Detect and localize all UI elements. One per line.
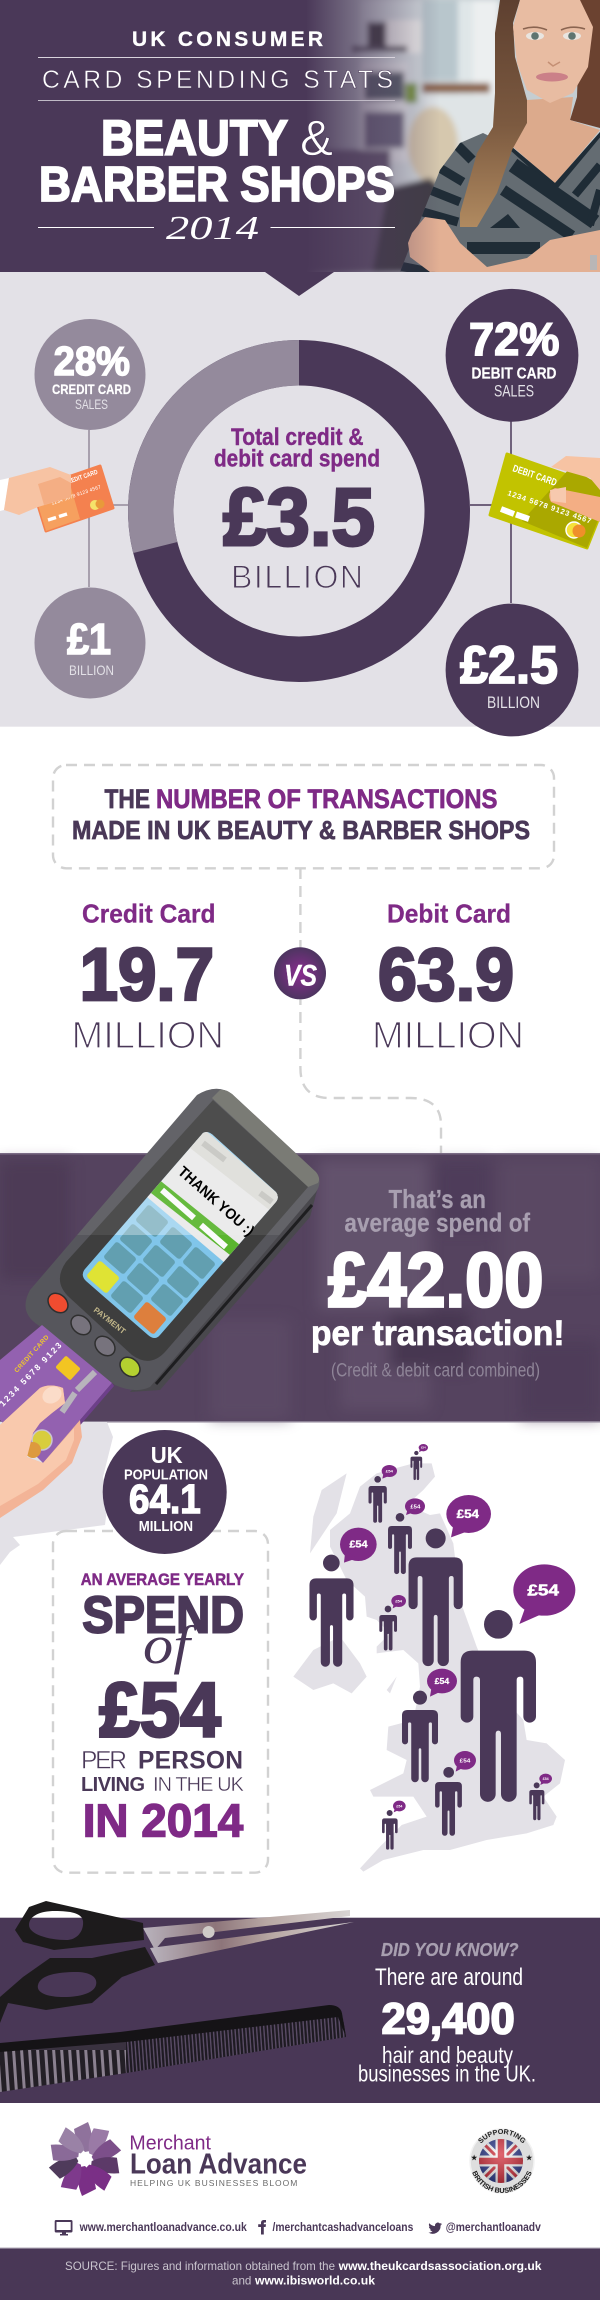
- yearly spend text: SPEND: [82, 1587, 244, 1645]
- average spend text: £42.00: [328, 1238, 544, 1324]
- connector lines: [89, 421, 511, 603]
- credit card count: MILLION: [72, 1015, 224, 1057]
- icon: hand holding credit card: 1234 5678 9123 4567: [51, 484, 102, 507]
- title: BEAUTY: [101, 110, 288, 166]
- thank you text: THANK YOU :): [174, 1163, 258, 1240]
- bubble: £2.5 billion: BILLION: [487, 694, 540, 712]
- card stripe: [62, 1372, 95, 1412]
- icon: hand holding debit card: 1234 5678 9123 4567: [506, 488, 592, 526]
- yearly spend text: [81, 1570, 245, 1847]
- figure: mid england: £54: [435, 1677, 450, 1686]
- panel: average spend: [0, 1153, 600, 1422]
- figure: far north: [369, 1465, 397, 1523]
- ring: [590, 255, 597, 270]
- vs badge: VS: [284, 960, 317, 993]
- card chip: [55, 1355, 81, 1381]
- website text: www.merchantloanadvance.co.uk: [79, 2220, 247, 2234]
- bubble: £1 billion: [34, 588, 146, 698]
- icon: twitter: [428, 2223, 442, 2234]
- figure: wales small: [382, 1801, 406, 1850]
- logo wordmark: HELPING UK BUSINESSES BLOOM: [130, 2178, 297, 2188]
- average spend text: (Credit & debit card combined): [331, 1361, 540, 1382]
- yearly spend text: PERSON: [138, 1747, 243, 1774]
- bubble: 72% debit card: DEBIT CARD: [472, 366, 556, 383]
- source text: SOURCE: Figures and information obtained from the: [65, 2259, 335, 2273]
- centre total text: [214, 424, 380, 595]
- heading: NUMBER OF TRANSACTIONS: [156, 784, 498, 814]
- figure: central small: [379, 1595, 406, 1651]
- badge flag: [479, 2139, 523, 2183]
- bubble: £1 billion: BILLION: [69, 662, 114, 678]
- figure: large upper: [409, 1495, 491, 1666]
- terminal rear edge: [130, 1187, 318, 1392]
- figure: central small: £54: [395, 1600, 403, 1604]
- debit card count: [372, 899, 524, 1057]
- figure: left: [309, 1528, 377, 1667]
- centre total text: debit card spend: [214, 446, 380, 473]
- title: &: [300, 110, 333, 166]
- map shadow behind hand: [0, 1422, 113, 1565]
- figure: upper middle: £54: [410, 1504, 420, 1510]
- population bubble: UK: [151, 1442, 183, 1468]
- panel: source footer: [0, 2247, 600, 2300]
- average spend text: average spend of: [344, 1208, 530, 1238]
- did you know text: DID YOU KNOW?: [381, 1939, 518, 1960]
- figure: largest: £54: [527, 1583, 559, 1600]
- woman's striped top: [400, 130, 600, 272]
- header notch: [265, 272, 334, 296]
- bubble: 72% debit card: SALES: [494, 382, 534, 401]
- terminal top bevel: [212, 1090, 319, 1187]
- panel: total spend: [0, 272, 600, 736]
- purple card: [0, 1325, 112, 1463]
- average spend text: per transaction!: [311, 1314, 564, 1353]
- logo wordmark: Loan Advance: [130, 2148, 307, 2180]
- screen highlight above section line: [114, 1132, 276, 1235]
- centre total text: Total credit &: [231, 424, 364, 451]
- bubble: 28% credit card: 28%: [54, 338, 130, 384]
- terminal screen: [82, 1132, 278, 1338]
- heading: MADE IN UK BEAUTY & BARBER SHOPS: [72, 815, 530, 845]
- bubble: £1 billion: £1: [67, 615, 111, 664]
- yearly spend text: LIVING: [81, 1774, 145, 1796]
- bubble: 28% credit card: SALES: [75, 396, 108, 412]
- header photo: salon and woman: [314, 0, 600, 272]
- centre total text: BILLION: [231, 559, 363, 595]
- panel: did you know: [0, 1901, 600, 2103]
- source text: [65, 2259, 542, 2287]
- figure: far north: £54: [386, 1469, 394, 1474]
- bubble: 72% debit card: [446, 289, 578, 422]
- figure: south middle: £54: [460, 1759, 471, 1765]
- yearly spend text: IN 2014: [83, 1795, 243, 1847]
- figure: largest: [461, 1564, 575, 1802]
- logo: merchant loan advance: [46, 2122, 307, 2196]
- icon: facebook: [258, 2220, 266, 2234]
- figure: top: £54: [421, 1446, 426, 1450]
- average spend text: That’s an: [388, 1184, 486, 1214]
- bubble: 28% credit card: [34, 319, 146, 430]
- woman's hair: [460, 0, 527, 227]
- icon: hand with purple card: [0, 1325, 114, 1518]
- map of UK and Ireland: [293, 1463, 565, 1872]
- terminal face: [60, 1100, 308, 1361]
- payment label: PAYMENT: [92, 1305, 127, 1336]
- source text: and: [232, 2273, 251, 2287]
- logo wordmark: [129, 2132, 307, 2188]
- terminal buttons: [44, 1289, 144, 1381]
- figure: top: [410, 1444, 428, 1480]
- title: BARBER SHOPS: [39, 158, 395, 212]
- bubble: £2.5 billion: [446, 604, 578, 736]
- icon: hand holding credit card: [0, 466, 113, 531]
- yearly spend text: of: [143, 1615, 198, 1675]
- UK map with figures: [293, 1444, 575, 1872]
- card labels: CREDIT CARD: [13, 1334, 51, 1374]
- icon: hand holding debit card: [490, 454, 600, 548]
- population bubble: [103, 1430, 227, 1554]
- logo wordmark: Merchant: [129, 2132, 211, 2154]
- figure: large upper: £54: [457, 1508, 480, 1521]
- heading: THE: [104, 784, 150, 814]
- figure: left: £54: [349, 1539, 368, 1550]
- donut chart: [128, 340, 447, 659]
- title: CARD SPENDING STATS: [42, 67, 393, 94]
- bubble: 72% debit card: 72%: [469, 313, 560, 365]
- credit card count: [72, 899, 224, 1057]
- yearly spend text: IN THE UK: [153, 1774, 245, 1796]
- yearly spend text: PER: [81, 1747, 127, 1774]
- badge lettering: [471, 2129, 533, 2193]
- badge lettering: ★: [526, 2154, 533, 2162]
- credit card count: 19.7: [80, 933, 214, 1016]
- source text: www.theukcardsassociation.org.uk: [338, 2259, 542, 2273]
- dashed heading box: [53, 765, 554, 868]
- icon: payment terminal: [20, 1085, 330, 1392]
- panel: header: [0, 0, 600, 296]
- terminal body: [26, 1089, 320, 1390]
- facebook text: /merchantcashadvanceloans: [272, 2220, 414, 2234]
- debit card count: Debit Card: [387, 899, 511, 929]
- source text: www.ibisworld.co.uk: [254, 2273, 375, 2287]
- did you know text: hair and beauty: [382, 2042, 513, 2068]
- title: [38, 28, 395, 247]
- badge: supporting british businesses: [470, 2128, 534, 2194]
- woman's face: [513, 0, 593, 103]
- woman's neck and chest: [513, 97, 600, 184]
- keypad: [86, 1204, 216, 1335]
- yearly spend text: AN AVERAGE YEARLY: [81, 1570, 245, 1589]
- bubble: £2.5 billion: £2.5: [460, 636, 558, 695]
- credit card count: Credit Card: [82, 899, 216, 929]
- panel: transactions: [53, 765, 554, 1153]
- woman's eyes, nose and lips: [523, 27, 585, 82]
- centre total text: £3.5: [223, 472, 375, 563]
- vs badge: [274, 947, 326, 999]
- icon: flower mark: [46, 2122, 124, 2196]
- icon: comb: [0, 2005, 346, 2092]
- did you know text: There are around: [375, 1964, 523, 1991]
- upper device highlight: [78, 1089, 320, 1235]
- title: 2014: [166, 210, 259, 247]
- twitter text: @merchantloanadv: [446, 2220, 541, 2234]
- did you know text: [358, 1939, 536, 2087]
- top stripes: [400, 132, 600, 272]
- population bubble: MILLION: [139, 1519, 193, 1535]
- debit card count: MILLION: [372, 1015, 524, 1057]
- icon: hand holding debit card: DEBIT CARD: [511, 463, 558, 489]
- icon: scissors: [0, 1901, 354, 2023]
- icon: monitor: [55, 2220, 72, 2236]
- badge lettering: SUPPORTING: [478, 2129, 526, 2143]
- thumb nail: [39, 1383, 65, 1407]
- did you know text: 29,400: [382, 1994, 515, 2043]
- population bubble: POPULATION: [124, 1468, 208, 1484]
- mastercard peeking: [32, 1430, 52, 1450]
- yearly spend text: £54: [99, 1668, 221, 1754]
- heading: [72, 784, 530, 845]
- figure: south middle: [435, 1751, 476, 1836]
- debit card count: 63.9: [378, 933, 514, 1016]
- badge lettering: ★: [471, 2154, 478, 2162]
- hair behind right side of face: [570, 0, 600, 128]
- figure: east small: £54: [543, 1777, 549, 1781]
- hand: [0, 1386, 82, 1518]
- contact row: [55, 2220, 541, 2236]
- figure: mid england: [402, 1669, 457, 1782]
- panel: yearly spend: [0, 1422, 575, 1873]
- average spend text: [311, 1184, 564, 1382]
- section background photo: [0, 1160, 600, 1420]
- badge lettering: BRITISH BUSINESSES: [472, 2170, 532, 2193]
- title: UK CONSUMER: [132, 28, 323, 51]
- dashed connector: [300, 868, 441, 1153]
- bubble: 28% credit card: CREDIT CARD: [52, 381, 131, 397]
- did you know text: businesses in the UK.: [358, 2061, 536, 2087]
- figure: wales small: £54: [396, 1804, 403, 1808]
- woman's hands: [408, 217, 600, 272]
- population bubble: 64.1: [129, 1476, 201, 1522]
- dashed box: [53, 1531, 268, 1873]
- figure: upper middle: [388, 1498, 425, 1574]
- icon: hand holding credit card: CREDIT CARD: [63, 469, 99, 487]
- figure: east small: [529, 1774, 552, 1820]
